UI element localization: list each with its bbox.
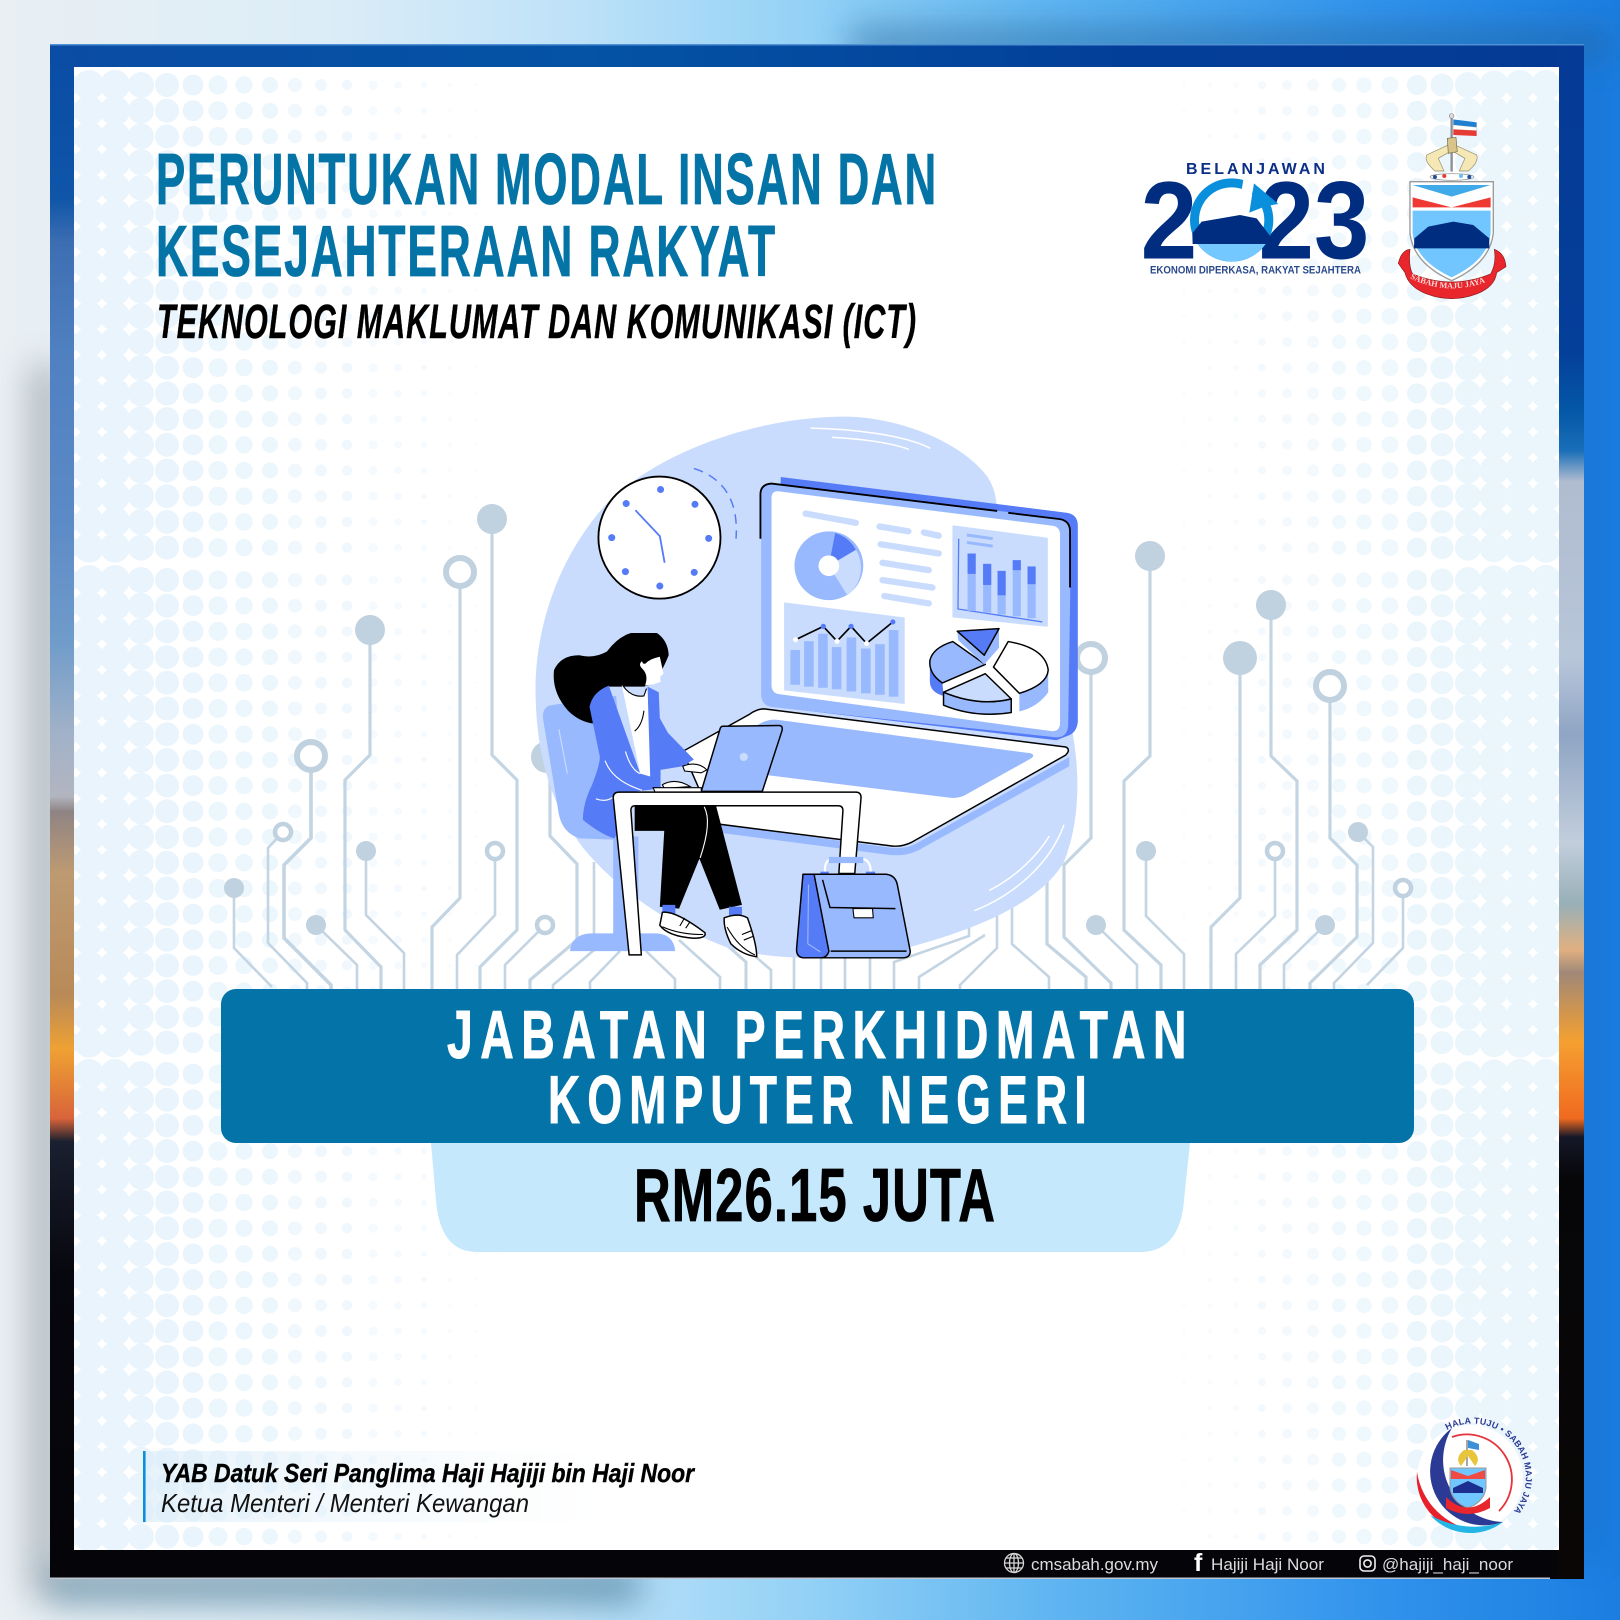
icon: globe (1004, 1554, 1024, 1572)
woman (554, 633, 757, 957)
signature block (143, 1451, 696, 1522)
footer social links (1004, 1549, 1514, 1577)
facebook name: Hajiji Haji Noor (1211, 1556, 1325, 1574)
logo: Sabah coat of arms: SABAH MAJU JAYA (1410, 274, 1486, 288)
title heading: KESEJAHTERAAN RAKYAT (156, 212, 777, 292)
laptop (653, 726, 782, 792)
logo: Belanjawan 2023: BELANJAWAN (1186, 161, 1325, 178)
blob highlights (811, 428, 1064, 910)
logo: Belanjawan 2023 (1141, 159, 1369, 282)
subtitle: TEKNOLOGI MAKLUMAT DAN KOMUNIKASI (ICT) (157, 296, 917, 349)
briefcase (797, 857, 910, 958)
logo: Belanjawan 2023: EKONOMI DIPERKASA, RAKYAT SEJAHTERA (1150, 264, 1361, 276)
amount: RM26.15 JUTA (634, 1153, 996, 1237)
signature block: YAB Datuk Seri Panglima Haji Hajiji bin Haji Noor (161, 1458, 696, 1488)
website: cmsabah.gov.my (1031, 1556, 1159, 1574)
logo: Hala Tuju Sabah Maju Jaya: HALA TUJU • SABAH MAJU JAYA (1444, 1418, 1532, 1513)
wall clock (598, 468, 736, 599)
department banner (221, 989, 1414, 1143)
donut chart (794, 531, 863, 600)
front table (613, 792, 861, 955)
dashboard monitor (760, 477, 1078, 740)
signature block: Ketua Menteri / Menteri Kewangan (161, 1488, 529, 1518)
icon: instagram (1360, 1556, 1375, 1571)
illustration: woman working at laptop with dashboard (536, 417, 1078, 958)
background blob (536, 417, 1077, 958)
circuit board lines (224, 504, 1411, 990)
logo: Hala Tuju Sabah Maju Jaya (1416, 1418, 1532, 1533)
department banner: JABATAN PERKHIDMATAN (447, 997, 1194, 1073)
amount box (431, 1143, 1190, 1252)
department banner: KOMPUTER NEGERI (548, 1062, 1094, 1138)
logo: Sabah coat of arms (1398, 113, 1506, 299)
icon: facebook: f (1194, 1549, 1203, 1577)
title heading: PERUNTUKAN MODAL INSAN DAN (156, 140, 938, 220)
stacked bar chart (954, 527, 1047, 626)
3D pie chart (930, 629, 1048, 714)
large desk surface (683, 709, 1069, 855)
office chair (543, 696, 675, 951)
title heading (156, 140, 938, 292)
instagram handle: @hajiji_haji_noor (1382, 1556, 1514, 1574)
logo: Belanjawan 2023: 23 (1259, 159, 1369, 282)
logo: Belanjawan 2023: 2 (1141, 159, 1197, 282)
line and bar chart (784, 602, 905, 704)
